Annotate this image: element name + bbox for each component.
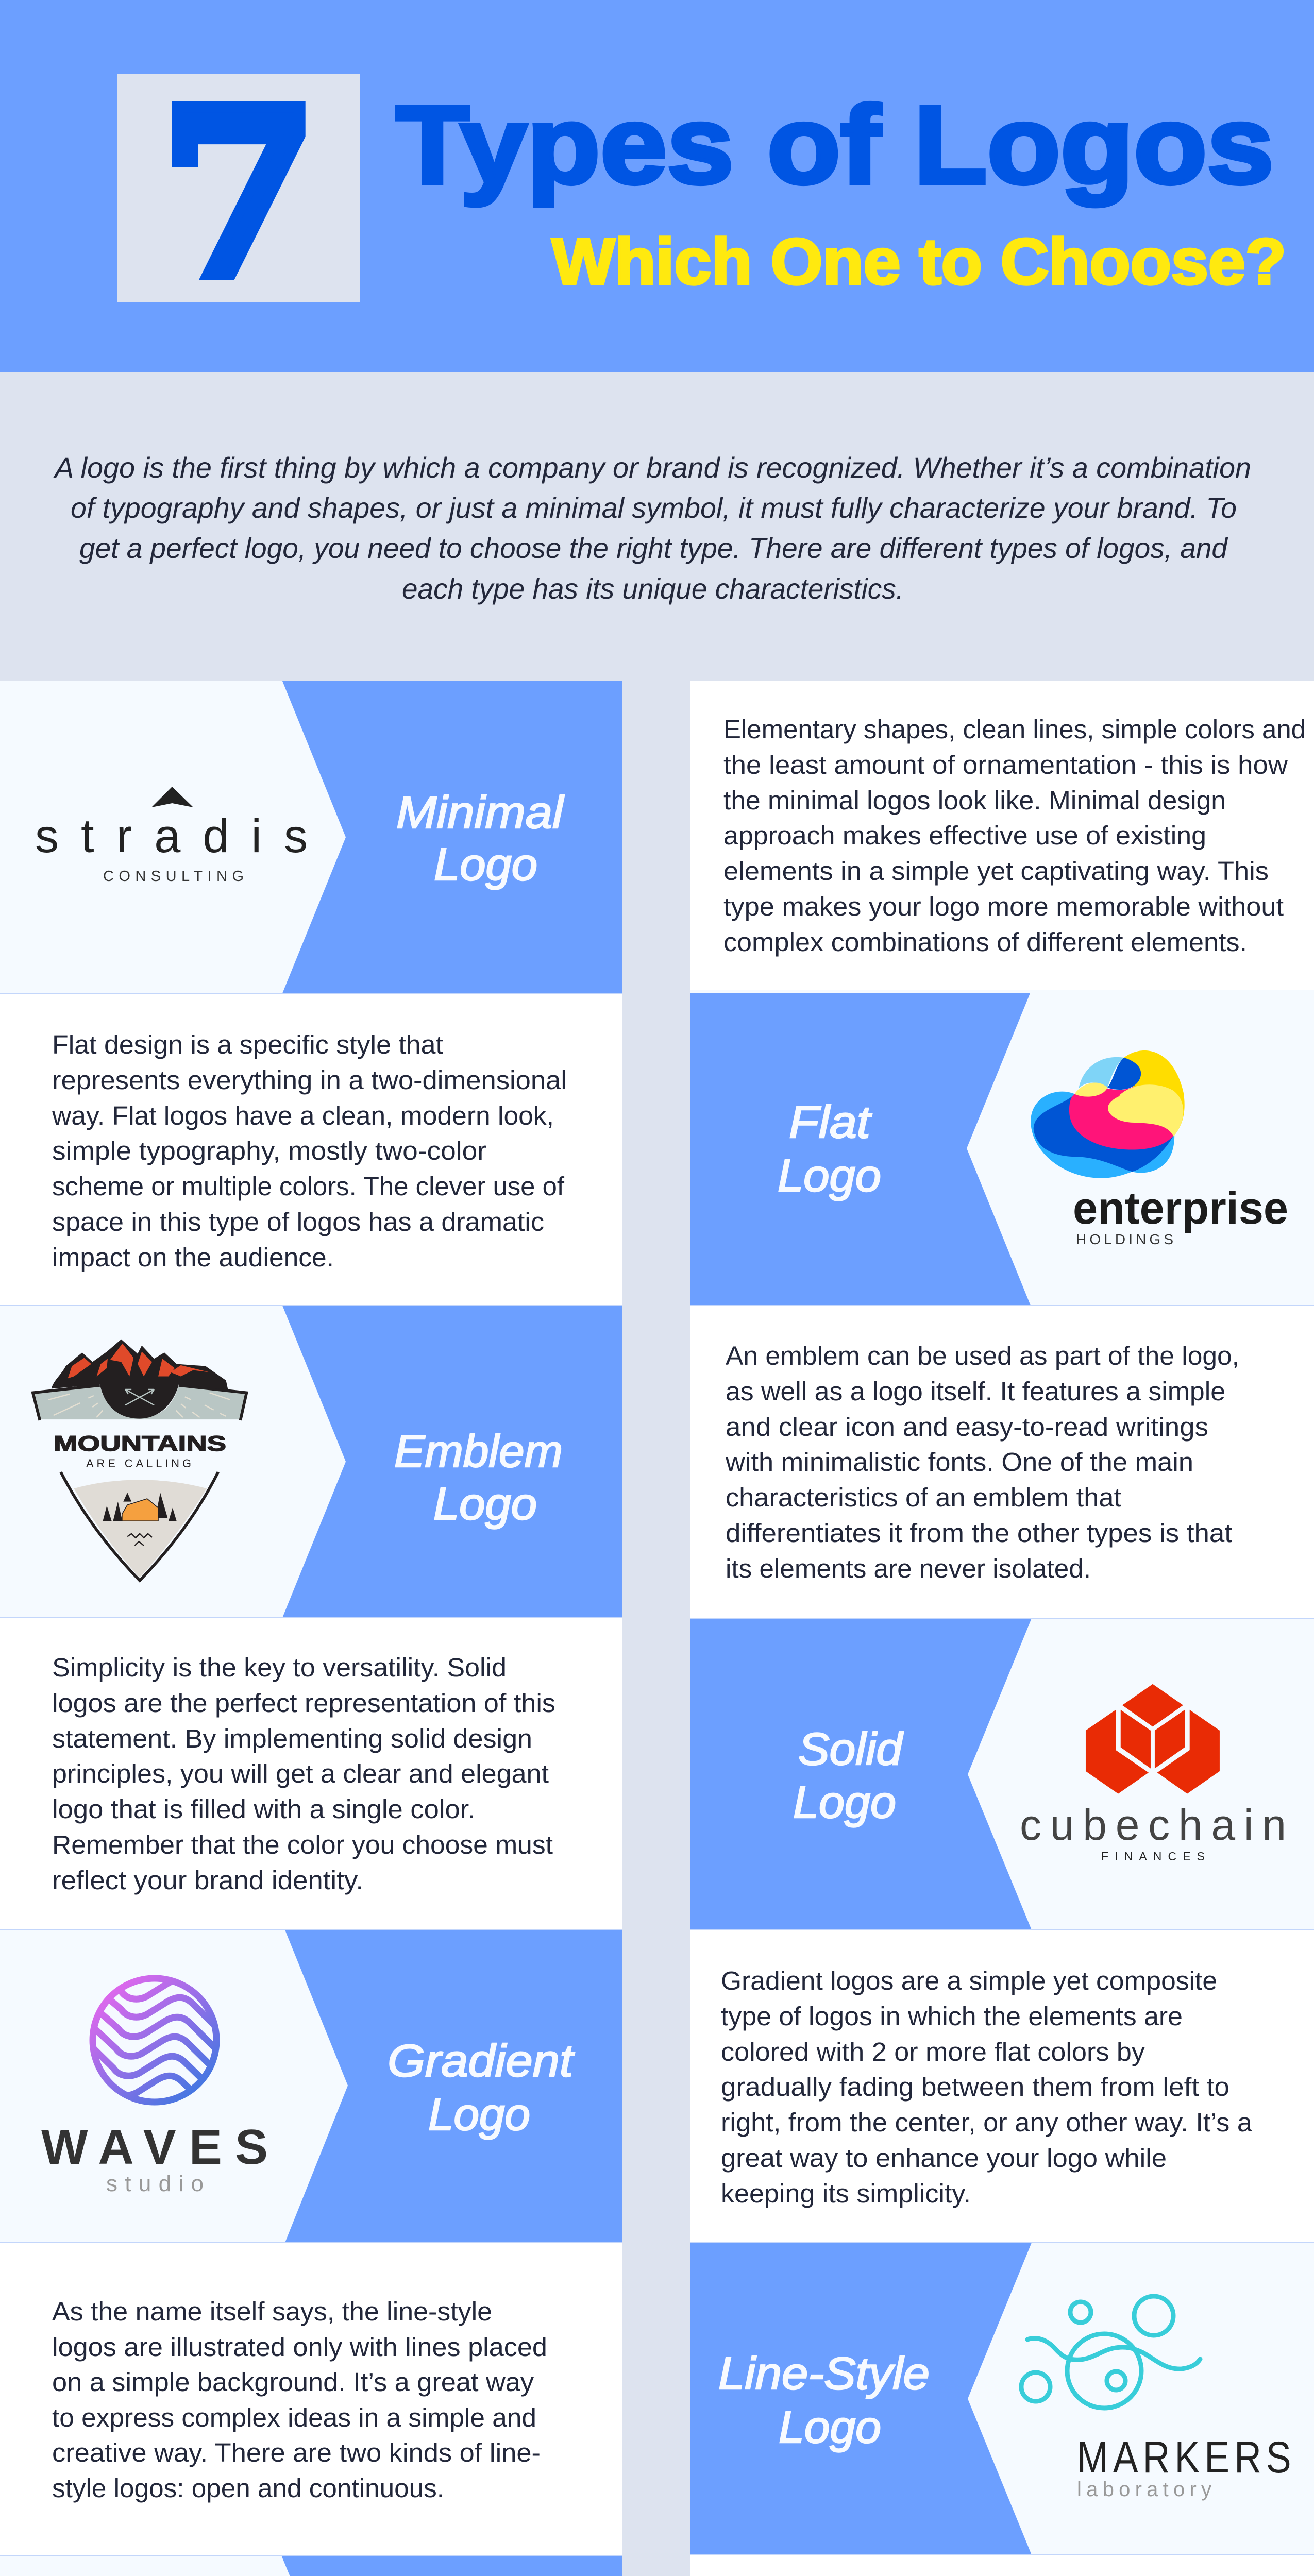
logo: enterprise: HOLDINGS: [1076, 1231, 1173, 1247]
panel: gradient description: type of logos in which the elements are: [721, 2002, 1183, 2031]
number tile: 7: [159, 59, 319, 328]
panel: minimal description: the least amount of ornamentation - this is how: [723, 750, 1288, 779]
header banner: [0, 0, 1314, 372]
label: minimal logo: Logo: [434, 839, 537, 890]
panel: gradient description: right, from the center, or any other way. It’s a: [721, 2108, 1253, 2137]
panel: minimal description: [690, 681, 1314, 993]
label: solid logo: [793, 1723, 904, 1827]
label: line-style logo: [718, 2348, 930, 2452]
panel: line-style logo: [690, 2243, 1314, 2555]
panel: emblem description: characteristics of an emblem that: [726, 1483, 1121, 1512]
panel: line-style description: to express complex ideas in a simple and: [52, 2403, 536, 2432]
icon: red cube: [1086, 1684, 1220, 1794]
panel: emblem description: as well as a logo itself. It features a simple: [726, 1377, 1225, 1406]
label: emblem logo: Emblem: [394, 1426, 563, 1477]
title: Types of Logos: [396, 83, 1274, 207]
panel: minimal description: the minimal logos look like. Minimal design: [723, 786, 1226, 815]
panel: gradient description: gradually fading between them from left to: [721, 2072, 1229, 2102]
panel: gradient logo: [0, 1930, 622, 2243]
intro paragraph: get a perfect logo, you need to choose the right type. There are different types of logos, and: [79, 532, 1228, 564]
label: minimal logo: Minimal: [396, 787, 565, 838]
icon: colour blobs: [1031, 1050, 1185, 1178]
logo: waves studio: [41, 1968, 268, 2196]
logo: mountains are calling: [33, 1340, 246, 1581]
subtitle: Which One to Choose?: [552, 225, 1286, 298]
logo: waves studio: WAVES: [41, 2120, 268, 2175]
logo: enterprise: enterprise: [1073, 1182, 1288, 1233]
panel: line-style description: on a simple background. It’s a great way: [52, 2367, 534, 2397]
intro paragraph: [53, 451, 1251, 605]
panel: solid description: principles, you will get a clear and elegant: [52, 1759, 549, 1788]
panel: line-style description: creative way. There are two kinds of line-: [52, 2438, 541, 2467]
panel: solid description: Simplicity is the key to versatility. Solid: [52, 1653, 507, 1682]
panel: watercolor logo: [0, 2555, 622, 2576]
label: solid logo: Solid: [798, 1723, 904, 1774]
label: flat logo: [778, 1096, 881, 1201]
panel: solid description: statement. By implementing solid design: [52, 1724, 532, 1753]
logo: mountains are calling: ARE CALLING: [86, 1457, 191, 1470]
panel: line-style description: As the name itself says, the line-style: [52, 2297, 492, 2326]
panel: line-style description: style logos: open and continuous.: [52, 2473, 444, 2503]
logo: stradis: CONSULTING: [103, 868, 244, 885]
panel: solid description: logo that is filled with a single color.: [52, 1794, 475, 1824]
panel: flat description: space in this type of logos has a dramatic: [52, 1207, 544, 1236]
logo: cubechain: FINANCES: [1101, 1850, 1205, 1863]
icon: mountain crest: [33, 1340, 246, 1581]
logo: cubechain: cubechain: [1020, 1801, 1286, 1849]
panel: flat description: impact on the audience.: [52, 1243, 334, 1272]
panel: gradient description: colored with 2 or more flat colors by: [721, 2037, 1145, 2066]
label: emblem logo: Logo: [433, 1478, 537, 1529]
logo: mountains are calling: MOUNTAINS: [54, 1431, 226, 1455]
panel: emblem description: with minimalistic fonts. One of the main: [725, 1447, 1193, 1477]
panel: gradient description: [690, 1930, 1314, 2243]
panel: solid description: reflect your brand identity.: [52, 1866, 363, 1895]
panel: gradient description: Gradient logos are a simple yet composite: [721, 1966, 1217, 1995]
panel: watercolor description: [690, 2555, 1314, 2576]
intro paragraph: A logo is the first thing by which a company or brand is recognized. Whether it’s a combination: [53, 451, 1251, 484]
panel: flat logo: [690, 990, 1314, 1306]
panel: minimal description: Elementary shapes, clean lines, simple colors and: [723, 715, 1306, 744]
panel: line-style description: [0, 2243, 622, 2555]
logo: waves studio: studio: [106, 2171, 204, 2196]
panel: flat description: scheme or multiple colors. The clever use of: [52, 1172, 565, 1201]
intro paragraph: each type has its unique characteristics.: [402, 572, 904, 605]
logo: markers laboratory: [1021, 2296, 1291, 2501]
panel: line-style description: logos are illustrated only with lines placed: [52, 2332, 547, 2362]
panel: minimal description: complex combinations of different elements.: [723, 927, 1247, 957]
panel: minimal description: type makes your logo more memorable without: [723, 892, 1284, 921]
panel: emblem description: differentiates it from the other types is that: [726, 1518, 1232, 1548]
logo: markers laboratory: laboratory: [1077, 2478, 1211, 2501]
panel: flat description: simple typography, mostly two-color: [52, 1136, 486, 1165]
label: solid logo: Logo: [793, 1776, 896, 1827]
logo: stradis: stradis: [35, 810, 308, 862]
panel: flat description: represents everything in a two-dimensional: [52, 1065, 567, 1095]
panel: solid description: logos are the perfect representation of this: [52, 1688, 555, 1718]
label: minimal logo: [396, 787, 565, 890]
logo: stradis: [35, 787, 308, 885]
panel: solid description: [0, 1618, 622, 1930]
label: emblem logo: [394, 1426, 563, 1529]
panel: solid description: Remember that the color you choose must: [52, 1830, 553, 1859]
panel: gradient description: keeping its simplicity.: [721, 2179, 971, 2208]
icon: line circles and wave: [1021, 2296, 1200, 2408]
label: line-style logo: Logo: [779, 2401, 881, 2452]
panel: flat description: way. Flat logos have a clean, modern look,: [52, 1101, 554, 1130]
panel: solid logo: [690, 1618, 1314, 1930]
panel: gradient description: great way to enhance your logo while: [721, 2143, 1167, 2173]
panel: emblem description: [690, 1306, 1314, 1618]
panel: flat description: Flat design is a specific style that: [52, 1030, 443, 1059]
label: line-style logo: Line-Style: [718, 2348, 930, 2399]
logo: markers laboratory: MARKERS: [1077, 2432, 1291, 2482]
logo: cubechain: [1020, 1684, 1286, 1863]
label: flat logo: Flat: [789, 1096, 872, 1147]
panel: minimal description: approach makes effective use of existing: [723, 821, 1206, 850]
panel: minimal logo: [0, 681, 622, 993]
icon: gradient wave circle: [90, 1975, 220, 2105]
label: gradient logo: Logo: [428, 2089, 530, 2140]
panel: emblem description: its elements are never isolated.: [726, 1554, 1091, 1583]
label: flat logo: Logo: [778, 1150, 881, 1201]
intro paragraph: of typography and shapes, or just a minimal symbol, it must fully characterize your brand. To: [71, 492, 1237, 524]
panel: emblem logo: [0, 1306, 622, 1618]
number tile: [117, 59, 360, 328]
panel: minimal description: elements in a simple yet captivating way. This: [723, 856, 1269, 886]
panel: emblem description: An emblem can be used as part of the logo,: [726, 1341, 1239, 1370]
panel: emblem description: and clear icon and easy-to-read writings: [726, 1412, 1208, 1442]
label: gradient logo: [388, 2035, 575, 2140]
panel: flat description: [0, 993, 622, 1306]
logo: enterprise: [1031, 1050, 1288, 1247]
label: gradient logo: Gradient: [388, 2035, 575, 2086]
